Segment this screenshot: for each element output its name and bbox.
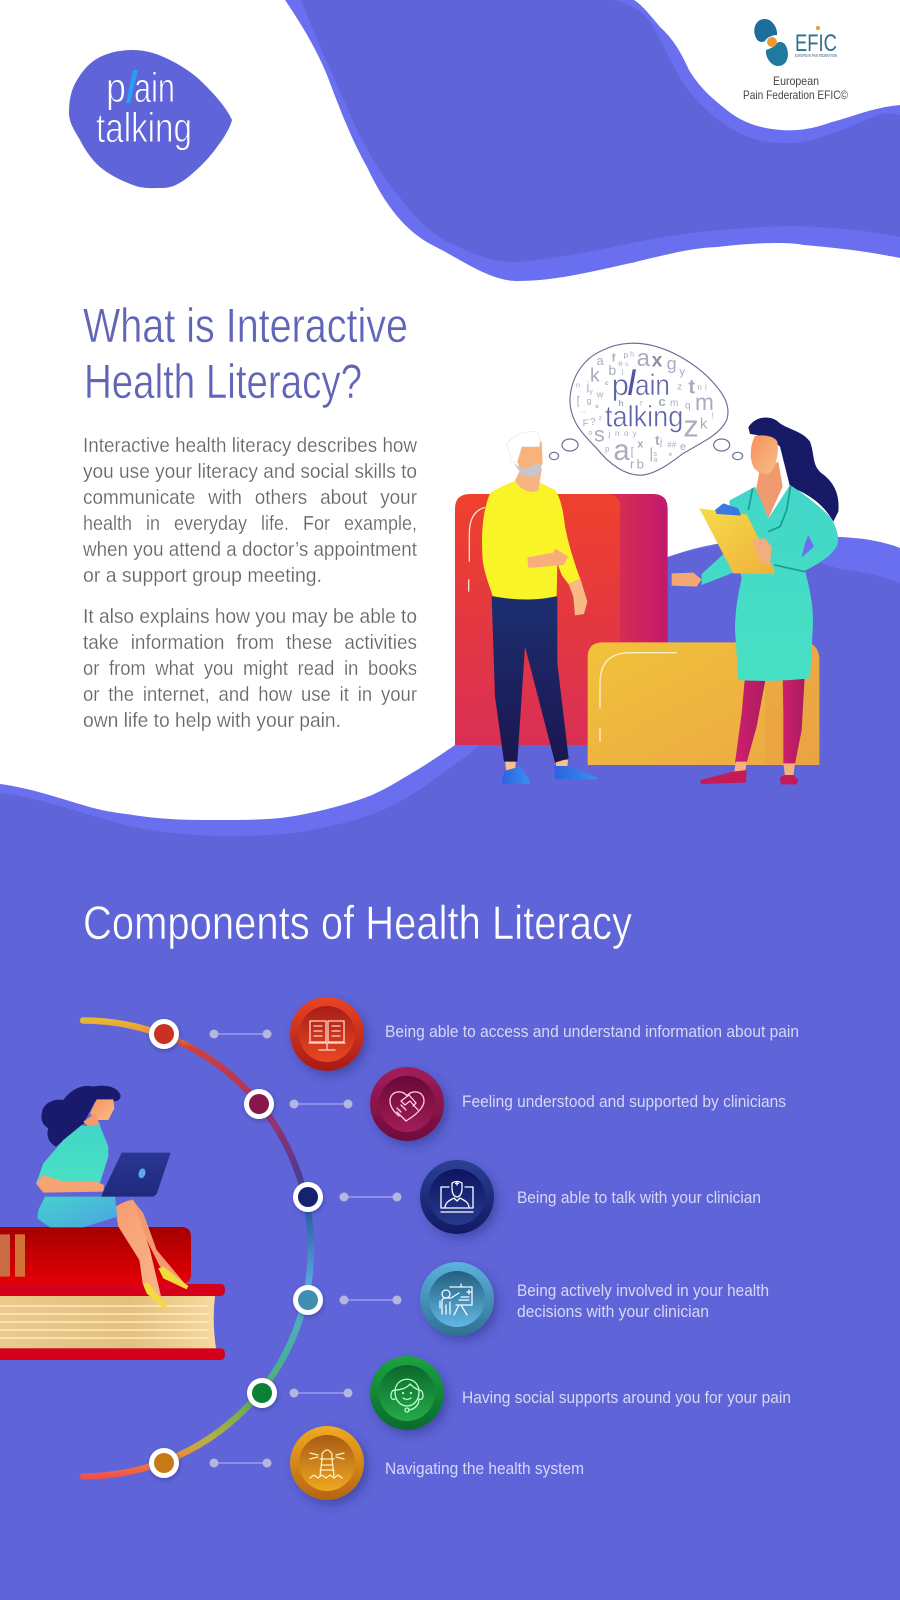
scattered letters: m bbox=[670, 398, 678, 409]
connector 1 bbox=[210, 1030, 272, 1038]
scattered letters: m bbox=[695, 389, 714, 415]
scattered letters: [ bbox=[577, 395, 581, 407]
text block: paragraph 1: or a support group meeting. bbox=[83, 565, 322, 587]
scattered letters: x bbox=[652, 351, 663, 372]
scattered letters: n bbox=[615, 429, 619, 438]
scattered letters: z bbox=[683, 410, 699, 444]
scattered letters: x bbox=[637, 438, 643, 450]
speech bubble with letter cloud bbox=[549, 343, 743, 475]
scattered letters: s bbox=[594, 423, 605, 447]
man: elderly patient bbox=[482, 431, 597, 784]
text block: paragraph 2: or from what you might read in books bbox=[83, 658, 417, 680]
scattered letters: h bbox=[618, 398, 624, 408]
connector 3 bbox=[340, 1192, 402, 1202]
timeline node 2 bbox=[244, 1089, 274, 1119]
text block: paragraph 1: communicate with others about your bbox=[83, 487, 417, 509]
text block: paragraph 2: own life to help with your pain. bbox=[83, 710, 341, 732]
logo: EFIC bbox=[743, 19, 848, 102]
label row 1: Being able to access and understand information about pain bbox=[385, 1023, 799, 1041]
scattered letters: h bbox=[630, 350, 634, 359]
scattered letters: | bbox=[649, 446, 653, 462]
scattered letters: F bbox=[583, 419, 589, 430]
icon button: doctor on screen bbox=[420, 1160, 494, 1234]
scattered letters: e bbox=[618, 359, 623, 368]
text block: paragraph 2: It also explains how you may be able to bbox=[83, 606, 417, 628]
connector 5 bbox=[290, 1388, 352, 1398]
heading: What is Interactive Health Literacy?: What is Interactive bbox=[83, 300, 408, 353]
scattered letters: a bbox=[597, 354, 605, 368]
scattered letters: [ bbox=[631, 446, 635, 458]
yellow armchair seat bbox=[588, 642, 819, 765]
lower background wave: light band bbox=[0, 536, 900, 1600]
scattered letters: k bbox=[590, 366, 600, 387]
scattered letters: s bbox=[625, 361, 629, 368]
scattered letters bbox=[576, 345, 714, 471]
text block: paragraph 1: Interactive health literacy describes how bbox=[83, 435, 418, 457]
timeline node 3 bbox=[293, 1182, 323, 1212]
icon button: book on monitor bbox=[290, 997, 364, 1071]
scattered letters: ## bbox=[667, 440, 677, 449]
text block: paragraph 2 bbox=[83, 606, 417, 732]
scattered letters: t bbox=[655, 432, 660, 448]
scattered letters: b bbox=[608, 362, 616, 378]
label row 3: Being able to talk with your clinician bbox=[517, 1189, 761, 1207]
scattered letters: * bbox=[668, 451, 672, 462]
scattered letters: g bbox=[587, 395, 592, 405]
scattered letters: r bbox=[630, 456, 635, 471]
illustration: patient and doctor with speech bubble bbox=[455, 343, 839, 784]
scattered letters: c bbox=[658, 394, 666, 409]
connector 6 bbox=[210, 1458, 272, 1468]
connector 4 bbox=[340, 1296, 402, 1304]
scattered letters: c bbox=[605, 380, 609, 387]
woman: doctor bbox=[672, 417, 839, 784]
scattered letters: j bbox=[586, 379, 589, 393]
logo: plain talking: talking bbox=[96, 104, 192, 151]
scattered letters: q bbox=[685, 400, 691, 411]
logo: EFIC: European bbox=[773, 74, 819, 88]
scattered letters: y bbox=[589, 388, 593, 395]
heading: What is Interactive Health Literacy?: Health Literacy? bbox=[84, 356, 362, 409]
illustration: woman on books with laptop bbox=[0, 1086, 225, 1360]
bubble wordmark: ain bbox=[635, 369, 670, 402]
scattered letters: o bbox=[624, 429, 629, 438]
scattered letters: n bbox=[576, 380, 580, 389]
scattered letters: a bbox=[653, 455, 658, 464]
scattered letters: k bbox=[700, 416, 708, 432]
icon button: teacher at board bbox=[420, 1262, 494, 1336]
scattered letters: g bbox=[667, 353, 677, 373]
logo: plain talking: p bbox=[106, 64, 126, 111]
scattered letters: z bbox=[599, 415, 602, 422]
scattered letters: z bbox=[677, 381, 682, 391]
scattered letters: p bbox=[623, 349, 628, 359]
red armchair back bbox=[455, 494, 668, 745]
label row 5: Having social supports around you for your pain bbox=[462, 1389, 791, 1407]
scattered letters: n bbox=[697, 383, 702, 392]
scattered letters: i bbox=[705, 383, 707, 392]
scattered letters: j bbox=[607, 429, 610, 439]
scattered letters: * bbox=[595, 404, 599, 415]
text block: paragraph 2: take information from these activities bbox=[83, 632, 417, 654]
scattered letters: o bbox=[588, 428, 592, 437]
label row 4: decisions with your clinician bbox=[517, 1303, 709, 1321]
icon button: headset face bbox=[370, 1356, 444, 1430]
stack of books bbox=[0, 1227, 225, 1360]
logo: plain talking bbox=[69, 50, 232, 188]
top wave: dark fill bbox=[301, 0, 900, 262]
scattered letters: r bbox=[640, 398, 643, 407]
scattered letters: f bbox=[612, 353, 616, 365]
scattered letters: ! bbox=[712, 411, 714, 420]
text block: paragraph 1: when you attend a doctor’s appointment bbox=[82, 539, 417, 561]
scattered letters: s bbox=[653, 449, 657, 458]
connector 2 bbox=[290, 1100, 352, 1108]
scattered letters: j bbox=[659, 437, 662, 448]
timeline arc bbox=[83, 1020, 311, 1476]
text block: paragraph 2: or the internet, and how use it in your bbox=[83, 684, 417, 706]
seated woman bbox=[36, 1086, 188, 1308]
scattered letters: b bbox=[637, 456, 644, 471]
text block: paragraph 1: health in everyday life. For example, bbox=[83, 513, 417, 535]
label row 6: Navigating the health system bbox=[385, 1460, 584, 1478]
logo: plain talking: ain bbox=[134, 64, 175, 111]
bubble wordmark: talking bbox=[605, 401, 683, 434]
scattered letters: y bbox=[679, 366, 685, 378]
scattered letters: y bbox=[633, 429, 637, 438]
lower background wave: dark fill bbox=[0, 544, 900, 1600]
bubble wordmark: p bbox=[612, 369, 629, 402]
scattered letters: e bbox=[680, 441, 686, 453]
timeline node 6 bbox=[149, 1448, 179, 1478]
logo: EFIC: EFIC bbox=[795, 30, 837, 57]
scattered letters: t bbox=[688, 375, 695, 398]
text block: paragraph 1: you use your literacy and social skills to bbox=[83, 461, 417, 483]
timeline node 1 bbox=[149, 1019, 179, 1049]
heading: What is Interactive Health Literacy? bbox=[83, 300, 408, 409]
scattered letters: p bbox=[605, 445, 610, 454]
scattered letters: i bbox=[622, 368, 624, 377]
scattered letters: a bbox=[637, 345, 651, 372]
timeline node 5 bbox=[247, 1378, 277, 1408]
text block: paragraph 1 bbox=[82, 435, 418, 587]
timeline node 4 bbox=[293, 1285, 323, 1315]
icon button: heart handshake bbox=[370, 1067, 444, 1141]
logo: EFIC: EUROPEAN PAIN FEDERATION bbox=[795, 53, 837, 58]
scattered letters: a bbox=[613, 434, 630, 467]
icon button: lighthouse bbox=[290, 1426, 364, 1500]
label row 2: Feeling understood and supported by clinicians bbox=[462, 1093, 786, 1111]
scattered letters: w bbox=[596, 389, 604, 399]
bubble wordmark bbox=[605, 369, 683, 434]
scattered letters: ... bbox=[579, 406, 585, 415]
scattered letters: ? bbox=[590, 417, 596, 428]
label row 4: Being actively involved in your health bbox=[517, 1282, 769, 1300]
top wave: light band bbox=[285, 0, 900, 281]
label row 4 bbox=[517, 1282, 769, 1321]
logo: EFIC: Pain Federation EFIC© bbox=[743, 88, 848, 102]
heading: Components of Health Literacy: Components of Health Literacy bbox=[83, 896, 632, 949]
